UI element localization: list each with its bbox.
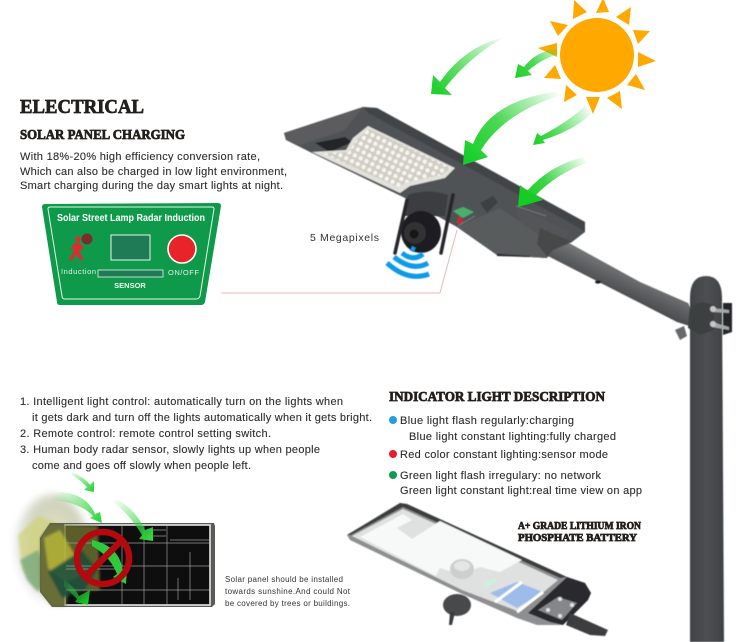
panel: radar induction sensor label (42, 203, 221, 305)
text block: feature list: come and goes off slowly when people left. (32, 460, 251, 472)
arrow: sunlight 1 (431, 37, 505, 95)
indicator sticker (453, 207, 474, 218)
icon: sun (538, 0, 656, 114)
arrow: over tree (50, 492, 102, 523)
green indicator (389, 470, 642, 497)
sensor window (111, 235, 150, 260)
callout line to sensor (221, 230, 457, 293)
text block: solar panel note (225, 575, 351, 608)
arm of the street lamp (540, 238, 702, 330)
battery compartment cover (528, 577, 591, 625)
blue indicator: Blue light constant lighting:fully charged (409, 431, 616, 443)
lamp head (284, 107, 585, 258)
text block: solar panel note: Solar panel should be installed (225, 575, 343, 584)
battery cells (490, 582, 543, 612)
arrow: sunlight 4 (533, 106, 592, 145)
right antenna (441, 195, 453, 253)
foliage (14, 494, 90, 610)
blue indicator: Blue light flash regularly:charging (400, 415, 574, 427)
arrow: beneath panel (64, 580, 90, 605)
illustration: solar panel shaded by tree (14, 472, 215, 610)
text block: feature list: 1. Intelligent light control: automatically turn on the lights when (20, 396, 343, 408)
mounting tab (566, 613, 608, 636)
title: electrical: ELECTRICAL (20, 96, 144, 118)
camera (395, 192, 453, 253)
text block: charging description: Smart charging during the day smart lights at night. (20, 180, 283, 192)
text block: feature list: 3. Human body radar sensor, slowly lights up when people (20, 444, 320, 456)
blue indicator (389, 415, 616, 443)
label: battery (518, 521, 642, 544)
arrow: through sign (92, 540, 127, 584)
icon: prohibition sign (77, 532, 129, 584)
red indicator: Red color constant lighting:sensor mode (400, 449, 608, 461)
icon: walking person (69, 234, 92, 261)
label: battery: A+ GRADE LITHIUM IRON (518, 521, 642, 532)
arrow: sunlight 5 (518, 157, 586, 207)
sensor title: Solar Street Lamp Radar Induction (57, 212, 205, 224)
text block: charging description: With 18%-20% high efficiency conversion rate, (20, 151, 260, 163)
pale charge module (482, 577, 498, 588)
led module (312, 126, 455, 193)
arrow: right (113, 497, 153, 541)
red on/off button (168, 235, 196, 263)
text block: feature list: it gets dark and turn off the lights automatically when it gets bright. (32, 412, 372, 424)
text block: feature list (20, 396, 372, 472)
label: 5 megapixels: 5 Megapixels (310, 232, 379, 244)
label: battery: PHOSPHATE BATTERY (518, 533, 638, 544)
text block: charging description (20, 151, 287, 192)
rear mount (443, 594, 471, 625)
text block: solar panel note: towards sunshine.And could Not (225, 587, 351, 596)
heading: solar panel charging: SOLAR PANEL CHARGING (20, 128, 185, 143)
induction label: Induction (61, 267, 96, 276)
arrow: top (72, 472, 94, 492)
sensor strip (98, 270, 163, 277)
handle recess (315, 137, 352, 152)
lamp shell (347, 503, 591, 625)
text block: solar panel note: be covered by trees or buildings. (225, 599, 350, 608)
text block: charging description: Which can also be charged in low light environment, (20, 166, 287, 178)
illustration: lamp interior with battery (347, 503, 608, 636)
text block: indicator lights (389, 415, 642, 497)
heading: indicator light description: INDICATOR LIGHT DESCRIPTION (389, 389, 605, 404)
sensor caption: SENSOR (114, 281, 146, 290)
arrow: sunlight 2 (515, 48, 558, 78)
left antenna (395, 200, 407, 253)
cell grid (66, 526, 209, 604)
tree shade over panel (40, 524, 100, 606)
panel frame (40, 523, 215, 607)
red marker (457, 215, 463, 223)
lower housing (457, 208, 547, 258)
icon: wireless signal (387, 248, 429, 276)
text block: feature list: 2. Remote control: remote control setting switch. (20, 428, 271, 440)
pole (675, 276, 732, 642)
green indicator: Green light constant light:real time view on app (400, 485, 642, 497)
arrow: sunlight 3 (463, 91, 562, 165)
pole bracket (675, 302, 732, 340)
green indicator: Green light flash irregulary: no network (400, 470, 602, 482)
speaker recess (450, 559, 474, 579)
on/off label: ON/OFF (168, 268, 199, 277)
